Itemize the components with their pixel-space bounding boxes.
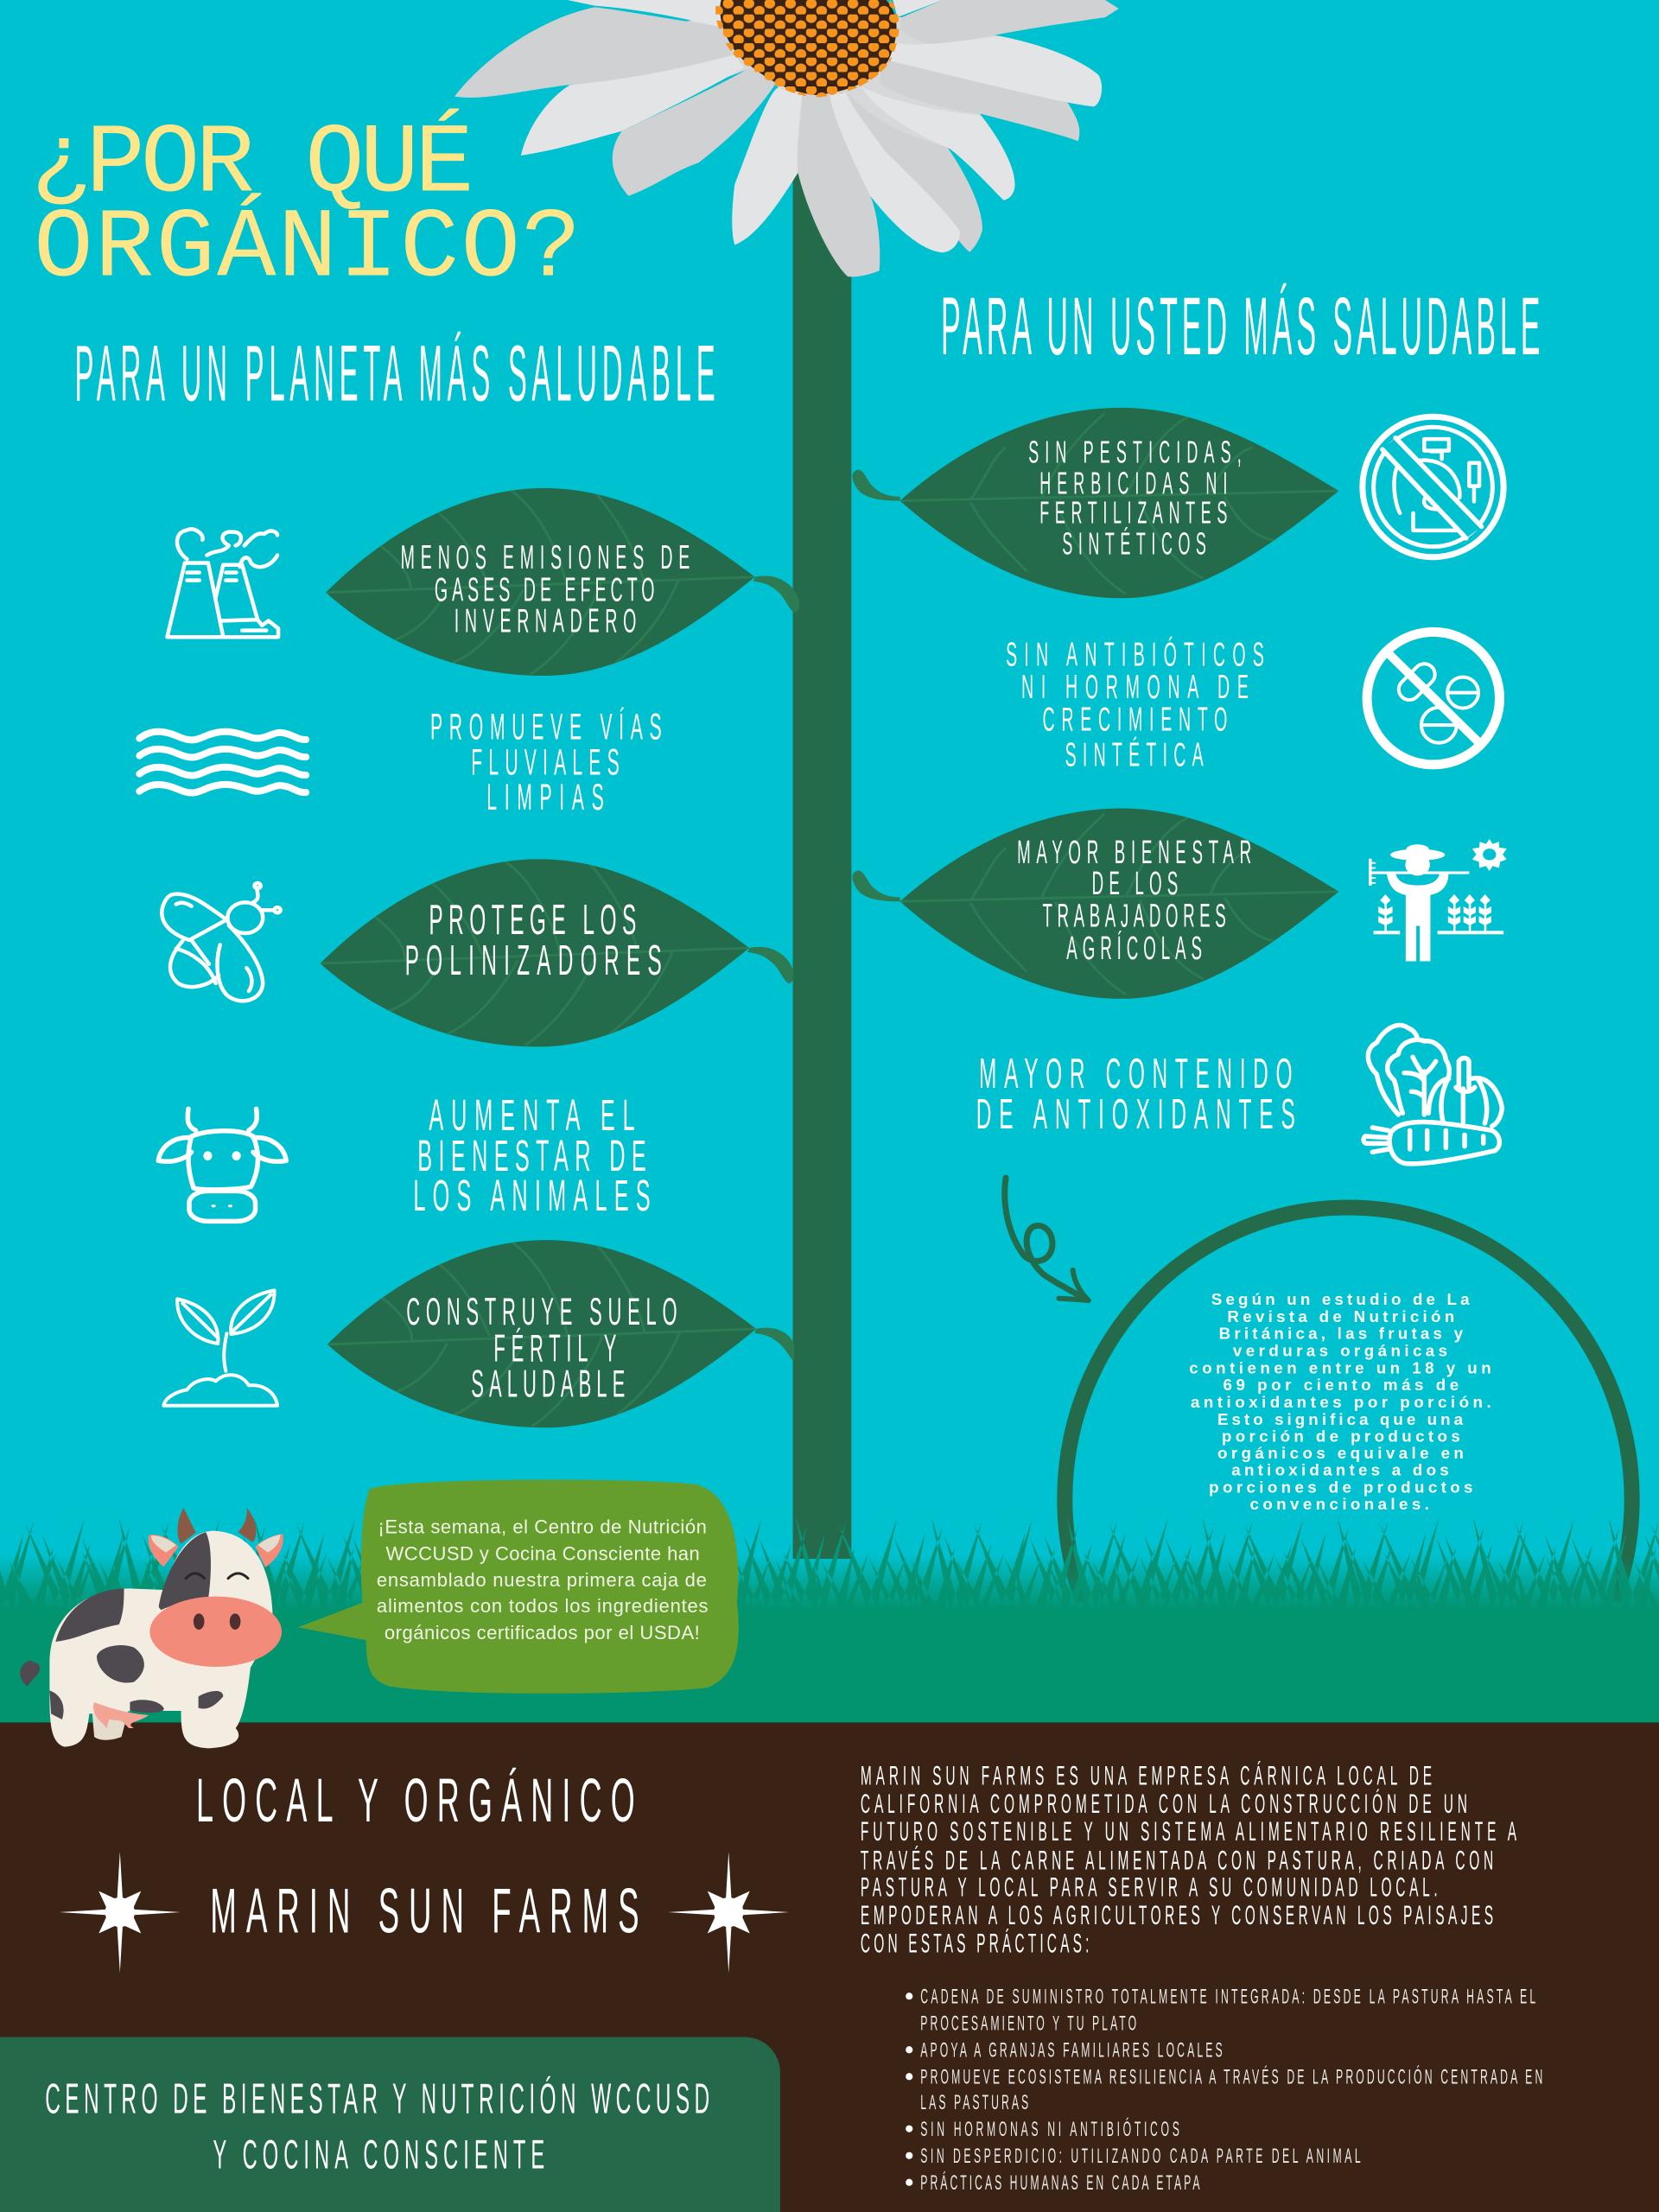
leaf: protects pollinators: POLINIZADORES [405, 938, 662, 985]
leaf: farm worker welfare: AGRÍCOLAS [1066, 931, 1202, 967]
heading: marin sun farms: MARIN SUN FARMS [210, 1876, 639, 1947]
text: clean waterways: LIMPIAS [486, 778, 604, 818]
icon: right sparkle [668, 1852, 789, 1973]
text: animal welfare: AUMENTA EL [429, 1091, 635, 1140]
text: marin sun farms description: CON ESTAS PRÁCTICAS: [861, 1929, 1089, 1959]
panel: wellness center: Y COCINA CONSCIENTE [213, 2131, 544, 2177]
list: farm practices: PRÁCTICAS HUMANAS EN CADA ETAPA [920, 2170, 1200, 2195]
text: antioxidant study: Esto significa que una [1217, 1410, 1464, 1428]
icon: no pills [1367, 632, 1500, 765]
text: more antioxidants [976, 1051, 1295, 1139]
icon: water waves [139, 732, 306, 793]
text: no antibiotics: NI HORMONA DE [1021, 668, 1249, 706]
text: animal welfare [413, 1091, 651, 1220]
icon: farmer [1369, 839, 1507, 962]
panel: wellness center [0, 2037, 780, 2212]
text: no antibiotics [1006, 635, 1264, 773]
leaf: fewer emissions: INVERNADERO [454, 601, 636, 639]
text: marin sun farms description: FUTURO SOSTENIBLE Y UN SISTEMA ALIMENTARIO RESILIENTE A [861, 1817, 1517, 1847]
text: antioxidant study: Británica, las frutas y [1219, 1324, 1464, 1342]
text: more antioxidants: MAYOR CONTENIDO [979, 1051, 1293, 1097]
text: animal welfare: LOS ANIMALES [413, 1173, 651, 1220]
list: farm practices: PROMUEVE ECOSISTEMA RESILIENCIA A TRAVÉS DE LA PRODUCCIÓN CENTRADA EN [920, 2064, 1542, 2089]
text: more antioxidants: DE ANTIOXIDANTES [976, 1091, 1295, 1139]
list: farm practices: SIN DESPERDICIO: UTILIZANDO CADA PARTE DEL ANIMAL [920, 2144, 1361, 2168]
leaf: no pesticides [852, 408, 1338, 598]
text: animal welfare: BIENESTAR DE [417, 1133, 646, 1180]
text: antioxidant study: 69 por ciento más de [1224, 1376, 1459, 1394]
text: marin sun farms description: EMPODERAN A LOS AGRICULTORES Y CONSERVAN LOS PAISAJES [861, 1901, 1493, 1931]
leaf: no pesticides: FERTILIZANTES [1039, 496, 1227, 531]
speech bubble: alimentos con todos los ingredientes [377, 1595, 709, 1617]
text: clean waterways: FLUVIALES [471, 743, 620, 783]
text: marin sun farms description: CALIFORNIA COMPROMETIDA CON LA CONSTRUCCIÓN DE UN [861, 1789, 1467, 1820]
list: farm practices [906, 1985, 1542, 2195]
leaf: protects pollinators [321, 859, 793, 1046]
text: marin sun farms description: MARIN SUN FARMS ES UNA EMPRESA CÁRNICA LOCAL DE [861, 1762, 1432, 1791]
leaf: protects pollinators: PROTEGE LOS [429, 897, 636, 944]
icon: cow head [158, 1109, 286, 1221]
heading: local and organic: LOCAL Y ORGÁNICO [196, 1767, 635, 1835]
text: antioxidant study: Revista de Nutrición [1227, 1307, 1454, 1325]
speech bubble: ¡Esta semana, el Centro de Nutrición [378, 1516, 707, 1538]
speech bubble [298, 1479, 739, 1694]
leaf: fertile soil [327, 1240, 794, 1427]
list: farm practices: LAS PASTURAS [920, 2090, 1028, 2114]
text: antioxidant study: porción de productos [1222, 1427, 1460, 1446]
title [31, 107, 582, 305]
leaf: farm worker welfare: DE LOS [1092, 866, 1178, 902]
speech bubble: WCCUSD y Cocina Consciente han [386, 1543, 700, 1565]
flower [454, 0, 1119, 276]
text: antioxidant study: antioxidantes a dos [1231, 1461, 1449, 1479]
text: marin sun farms description: TRAVÉS DE LA CARNE ALIMENTADA CON PASTURA, CRIADA CON [861, 1847, 1493, 1876]
text: antioxidant study [1189, 1290, 1491, 1513]
text: antioxidant study: porciones de productos [1209, 1478, 1472, 1496]
panel: wellness center: CENTRO DE BIENESTAR Y NUTRICIÓN WCCUSD [45, 2076, 709, 2123]
leaf: farm worker welfare: TRABAJADORES [1043, 899, 1226, 935]
leaf: farm worker welfare: MAYOR BIENESTAR [1017, 835, 1251, 871]
leaf: no pesticides: SIN PESTICIDAS, [1028, 435, 1242, 470]
flower stem [793, 141, 851, 1559]
icon: vegetables [1363, 1025, 1502, 1164]
list: farm practices: SIN HORMONAS NI ANTIBIÓTICOS [920, 2116, 1179, 2141]
leaf: fewer emissions [326, 488, 799, 676]
title: ¿POR QUÉ [31, 107, 474, 220]
circle arc around study text [1065, 1208, 1632, 1601]
leaf: fewer emissions: GASES DE EFECTO [435, 570, 655, 608]
list: farm practices: CADENA DE SUMINISTRO TOTALMENTE INTEGRADA: DESDE LA PASTURA HASTA EL [920, 1985, 1535, 2009]
text: antioxidant study: orgánicos equivale en [1217, 1444, 1464, 1462]
icon: left sparkle [60, 1852, 181, 1973]
text: antioxidant study: convencionales. [1250, 1495, 1429, 1513]
leaf: fewer emissions: MENOS EMISIONES DE [401, 538, 690, 576]
text: antioxidant study: Según un estudio de La [1211, 1290, 1470, 1308]
leaf: no pesticides: SINTÉTICOS [1062, 527, 1206, 562]
list: farm practices: APOYA A GRANJAS FAMILIARES LOCALES [920, 2038, 1223, 2063]
heading: healthier you: PARA UN USTED MÁS SALUDABLE [941, 282, 1541, 372]
list: farm practices: PROCESAMIENTO Y TU PLATO [920, 2012, 1136, 2036]
panel: soil band [0, 1722, 1659, 2212]
grass [0, 1510, 1659, 1724]
cow illustration [20, 1508, 283, 1748]
leaf: fertile soil: CONSTRUYE SUELO [406, 1291, 677, 1333]
leaf: no pesticides: HERBICIDAS NI [1039, 467, 1227, 501]
text: clean waterways: PROMUEVE VÍAS [430, 708, 662, 748]
icon: bee [162, 883, 281, 1001]
heading: healthier planet: PARA UN PLANETA MÁS SALUDABLE [75, 329, 715, 418]
text: marin sun farms description [861, 1762, 1517, 1959]
text: no antibiotics: SINTÉTICA [1065, 735, 1204, 773]
speech bubble: orgánicos certificados por el USDA! [385, 1622, 700, 1643]
text: clean waterways [430, 708, 662, 818]
speech bubble: ensamblado nuestra primera caja de [377, 1569, 707, 1591]
text: antioxidant study: antioxidantes por porción. [1191, 1393, 1491, 1411]
icon: no pesticides [1363, 416, 1503, 557]
arrow [1005, 1178, 1089, 1300]
text: no antibiotics: SIN ANTIBIÓTICOS [1006, 635, 1264, 673]
leaf: fertile soil: FÉRTIL Y [493, 1327, 616, 1370]
leaf: farm worker welfare [852, 809, 1338, 999]
leaf: fertile soil: SALUDABLE [471, 1363, 625, 1405]
icon: factory [167, 529, 278, 637]
title: ORGÁNICO? [34, 192, 582, 305]
text: no antibiotics: CRECIMIENTO [1043, 700, 1227, 739]
icon: sprout [163, 1290, 277, 1406]
text: antioxidant study: verduras orgánicas [1233, 1342, 1447, 1360]
text: antioxidant study: contienen entre un 18 y un [1189, 1358, 1491, 1376]
text: marin sun farms description: PASTURA Y LOCAL PARA SERVIR A SU COMUNIDAD LOCAL. [861, 1873, 1438, 1903]
